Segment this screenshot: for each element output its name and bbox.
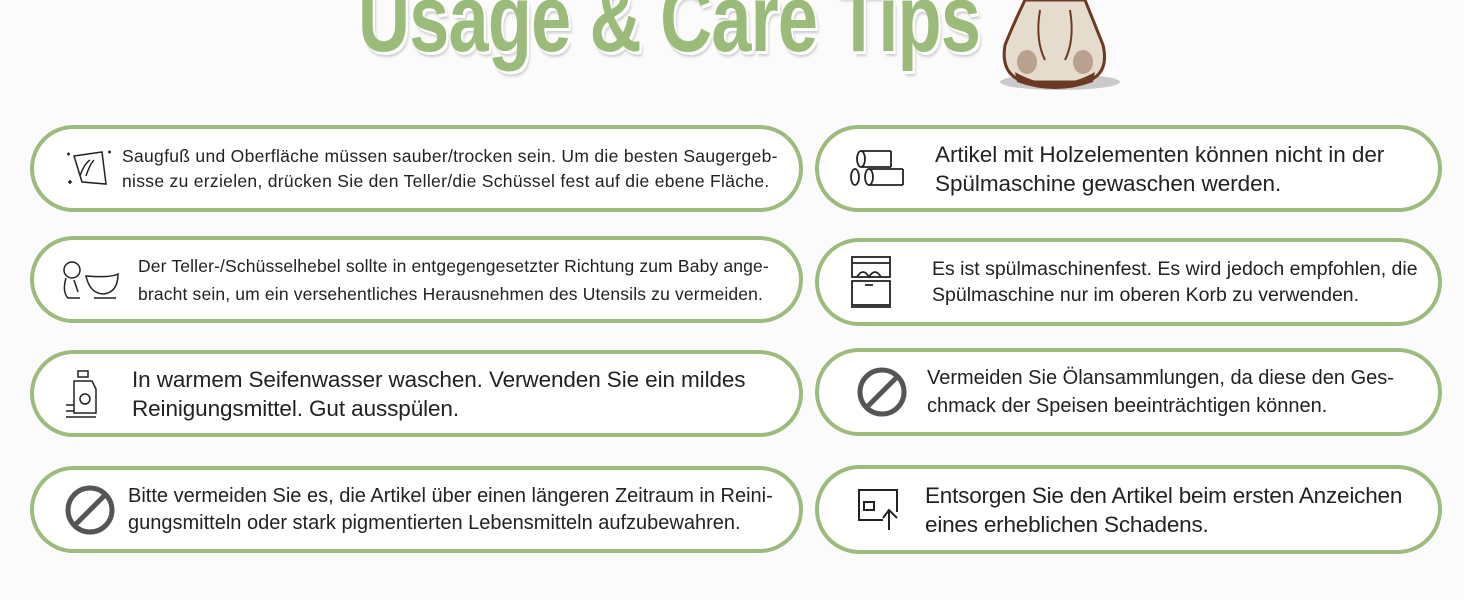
- panel: right 3: [815, 348, 1442, 436]
- icon: prohibited: [858, 368, 906, 416]
- panel: right 3: Vermeiden Sie Ölansammlungen, da diese den Ges-: [927, 367, 1394, 389]
- icon: card with arrow: [858, 489, 898, 530]
- panel: right 3: chmack der Speisen beeinträchtigen können.: [927, 395, 1327, 417]
- panel: left 2: [30, 236, 803, 323]
- panel: left 4: gungsmitteln oder stark pigmentierten Lebensmitteln aufzubewahren.: [128, 512, 741, 534]
- panel: right 4: eines erheblichen Schadens.: [925, 512, 1209, 536]
- panel: right 1: [815, 125, 1442, 212]
- icon: dishwasher: [851, 256, 891, 308]
- bear illustration: [1000, 0, 1120, 90]
- panel: left 1: Saugfuß und Oberfläche müssen sauber/trocken sein. Um die besten Saugergeb-: [122, 146, 778, 166]
- panel: left 1: [30, 125, 803, 212]
- panel: left 1: nisse zu erzielen, drücken Sie den Teller/die Schüssel fest auf die ebene Fläche.: [122, 170, 770, 190]
- panel: left 4: [30, 466, 803, 553]
- icon: baby and bowl: [63, 261, 119, 299]
- icon: cleaning hand: [67, 150, 111, 185]
- panel: left 4: Bitte vermeiden Sie es, die Artikel über einen längeren Zeitraum in Reini-: [128, 484, 773, 506]
- panel: left 3: [30, 350, 803, 437]
- panel: left 3: Reinigungsmittel. Gut ausspülen.: [132, 396, 459, 420]
- panel: right 2: [815, 238, 1442, 326]
- icon: wood logs: [850, 150, 904, 186]
- panel: right 2: Spülmaschine nur im oberen Korb zu verwenden.: [932, 284, 1359, 306]
- panel: right 2: Es ist spülmaschinenfest. Es wird jedoch empfohlen, die: [932, 258, 1418, 280]
- icon: detergent: [66, 370, 97, 418]
- panel: right 4: [815, 465, 1442, 554]
- panel: left 2: bracht sein, um ein versehentliches Herausnehmen des Utensils zu vermeiden.: [138, 284, 763, 304]
- panel: right 1: Spülmaschine gewaschen werden.: [935, 170, 1281, 196]
- panel: left 3: In warmem Seifenwasser waschen. Verwenden Sie ein mildes: [132, 366, 745, 392]
- panel: right 1: Artikel mit Holzelementen können nicht in der: [935, 142, 1384, 166]
- panel: right 4: Entsorgen Sie den Artikel beim ersten Anzeichen: [925, 482, 1402, 508]
- icon: prohibited: [66, 486, 114, 534]
- panel: left 2: Der Teller-/Schüsselhebel sollte in entgegengesetzter Richtung zum Baby ange-: [138, 256, 769, 276]
